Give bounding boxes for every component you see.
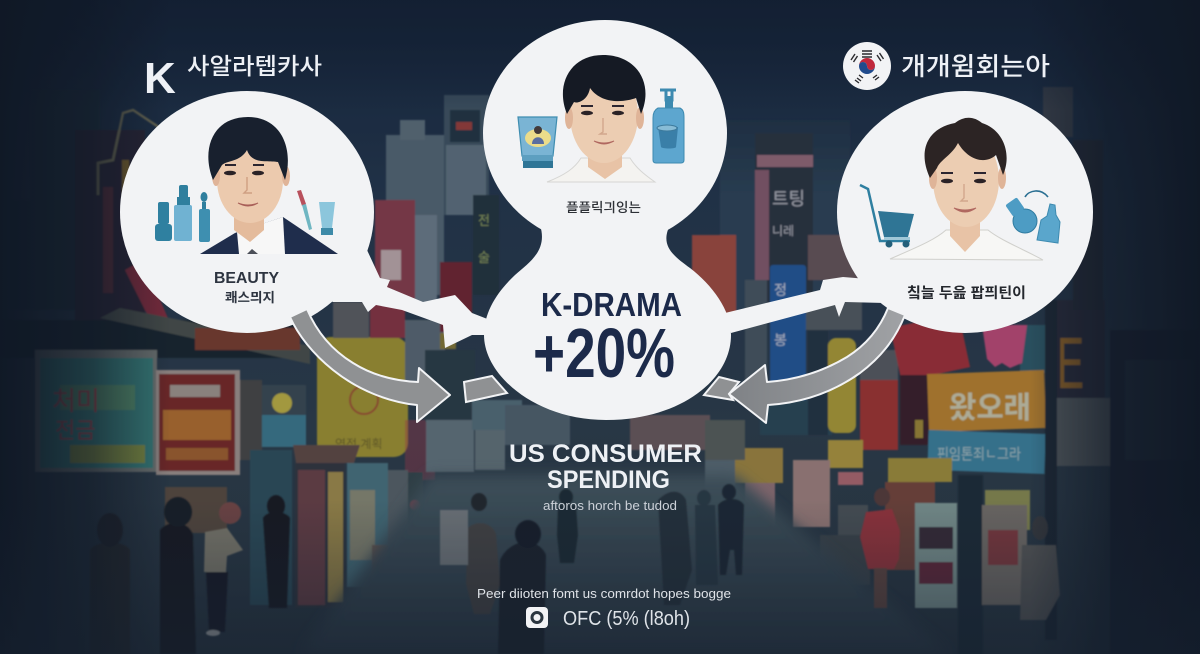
- central stat: K-DRAMA: [541, 286, 682, 323]
- right lower storefronts: [735, 300, 1200, 654]
- right sign cluster: E: [1057, 324, 1084, 404]
- left portrait: [200, 117, 338, 254]
- street: [300, 475, 950, 654]
- crowd on left: [90, 495, 290, 654]
- footnote text: Peer diioten fomt us comrdot hopes bogge: [477, 586, 731, 601]
- gray curved arrow left: [290, 309, 450, 422]
- crowd on street: [440, 484, 744, 654]
- left awning strip: [0, 308, 310, 364]
- left green poster: [35, 350, 157, 472]
- heading: left K label: K: [144, 54, 176, 103]
- heading: left K label: 사알라텝카사: [187, 53, 322, 79]
- centre-right signs: 니레: [772, 224, 794, 238]
- centre portrait: [547, 55, 655, 182]
- centre-left tower: 전: [478, 213, 490, 228]
- centre-left tower: 술: [478, 250, 490, 265]
- label: beauty: 쾌스믜지: [225, 290, 275, 305]
- icons: cosmetic bottles: [155, 185, 210, 242]
- orange sign: 왔오래: [949, 392, 1031, 425]
- left upper neon building: [10, 90, 173, 330]
- label: beauty: BEAUTY: [214, 270, 280, 287]
- label: beauty: [214, 270, 280, 305]
- central stat: [533, 286, 682, 392]
- icon: pump bottle: [653, 90, 684, 163]
- kiosks: [165, 445, 423, 608]
- heading: US consumer spending: [509, 440, 702, 494]
- teal sign: 핀임톤죄ㄴ그라: [937, 446, 1021, 463]
- subheading: aftoros horch be tudod: [543, 499, 677, 513]
- centre distant storefronts: [475, 405, 745, 525]
- left red poster: [156, 370, 240, 475]
- small blue sign: [240, 380, 306, 460]
- heading: right Korean label: 개개윔회는아: [901, 53, 1050, 81]
- gray arrow stub left: [464, 376, 507, 402]
- icon: camera badge: [526, 607, 548, 628]
- left green poster: 전금: [55, 418, 95, 443]
- heading: left K label: [144, 53, 322, 103]
- centre-right signs: 봉: [774, 332, 787, 348]
- source line: OFC (5% (l8oh): [563, 608, 690, 630]
- centre-right signs: 트팅: [772, 189, 805, 209]
- person in white at right: [1020, 516, 1060, 620]
- heading: US consumer spending: US CONSUMER: [509, 440, 702, 468]
- icons: lipstick and tube: [297, 190, 335, 235]
- centre-left tower: [375, 95, 522, 472]
- teal sign: [927, 430, 1046, 474]
- right portrait: [890, 118, 1043, 260]
- centre-right signs: [692, 120, 862, 435]
- panel: connected speech bubbles: [120, 20, 1093, 420]
- icon: perfume bottles: [1005, 191, 1060, 243]
- icon: shopping cart: [860, 185, 914, 248]
- gray curved arrow right: [729, 308, 905, 423]
- orange sign: [927, 370, 1046, 432]
- heading: US consumer spending: SPENDING: [547, 466, 670, 494]
- central stat: +20%: [533, 314, 675, 392]
- yellow round sign: 역점 계획: [335, 437, 382, 451]
- icon: Korean flag: [843, 42, 891, 90]
- left green poster: 처미: [52, 386, 100, 416]
- label: right korean caption: 칰늘 두읊 팝픠틴이: [907, 285, 1026, 302]
- gray arrow stub right: [704, 377, 739, 400]
- woman in red: [860, 488, 900, 608]
- icon: cream tube: [518, 117, 557, 168]
- right sign cluster: [808, 87, 1105, 450]
- yellow round sign: [317, 302, 456, 480]
- label: centre korean caption: 플플릭긔잉는: [566, 200, 641, 215]
- centre-right signs: 정: [774, 282, 787, 298]
